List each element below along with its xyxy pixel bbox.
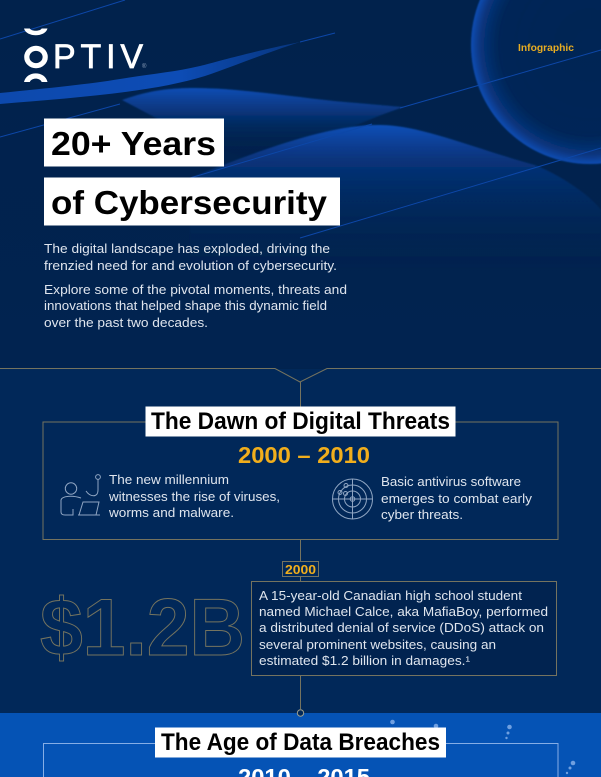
- section one background: [0, 369, 601, 713]
- intro text: over the past two decades.: [44, 315, 208, 330]
- callout: MafiaBoy attack: several prominent websites, causing an: [259, 637, 496, 652]
- text: viruses: The new millennium: [109, 472, 229, 487]
- text: viruses: [108, 472, 280, 520]
- icon: hacker with fishing hook: [61, 475, 100, 515]
- callout: MafiaBoy attack: named Michael Calce, aka MafiaBoy, performed: [259, 604, 548, 619]
- intro text: Explore some of the pivotal moments, threats and: [44, 282, 347, 297]
- title line one: [44, 118, 224, 166]
- logo: Optiv: PTIV: [53, 38, 143, 76]
- logo: Optiv: ®: [142, 63, 147, 70]
- text: viruses: worms and malware.: [108, 505, 234, 520]
- section one timeline connector: [0, 368, 601, 709]
- timeline node: [297, 710, 304, 716]
- callout: MafiaBoy attack: A 15-year-old Canadian high school student: [259, 588, 522, 603]
- text: antivirus: emerges to combat early: [381, 491, 533, 506]
- panel: The Age of Data Breaches: [44, 728, 558, 777]
- big stat: $1.2B: $1.2B: [40, 583, 245, 673]
- text: viruses: witnesses the rise of viruses,: [108, 489, 280, 504]
- title line one: 20+ Years: [51, 125, 216, 162]
- logo: Optiv: [24, 28, 147, 82]
- section heading: The Age of Data Breaches: [161, 729, 440, 756]
- intro text: frenzied need for and evolution of cybersecurity.: [44, 258, 337, 273]
- callout: MafiaBoy attack: [252, 582, 556, 676]
- icon: radar: [332, 479, 372, 519]
- callout: MafiaBoy attack: a distributed denial of service (DDoS) attack on: [259, 620, 544, 635]
- hero background: [0, 0, 601, 238]
- title line two: of Cybersecurity: [51, 184, 328, 221]
- section two background: [0, 713, 601, 777]
- intro text: [44, 241, 347, 330]
- callout: MafiaBoy attack: estimated $1.2 billion in damages.¹: [259, 653, 471, 668]
- section heading: The Dawn of Digital Threats: [151, 408, 450, 435]
- text: antivirus: [381, 474, 533, 522]
- decorative dots: [390, 720, 575, 774]
- date range: 2000 – 2010: [238, 442, 370, 468]
- title line two: [44, 178, 340, 226]
- label: Infographic: Infographic: [518, 42, 574, 54]
- year tag: 2000: 2000: [285, 562, 316, 577]
- panel: The Dawn of Digital Threats: [43, 406, 558, 540]
- intro text: The digital landscape has exploded, driving the: [44, 241, 330, 256]
- text: antivirus: Basic antivirus software: [381, 474, 521, 489]
- text: antivirus: cyber threats.: [381, 507, 463, 522]
- intro text: innovations that helped shape this dynamic field: [44, 298, 327, 313]
